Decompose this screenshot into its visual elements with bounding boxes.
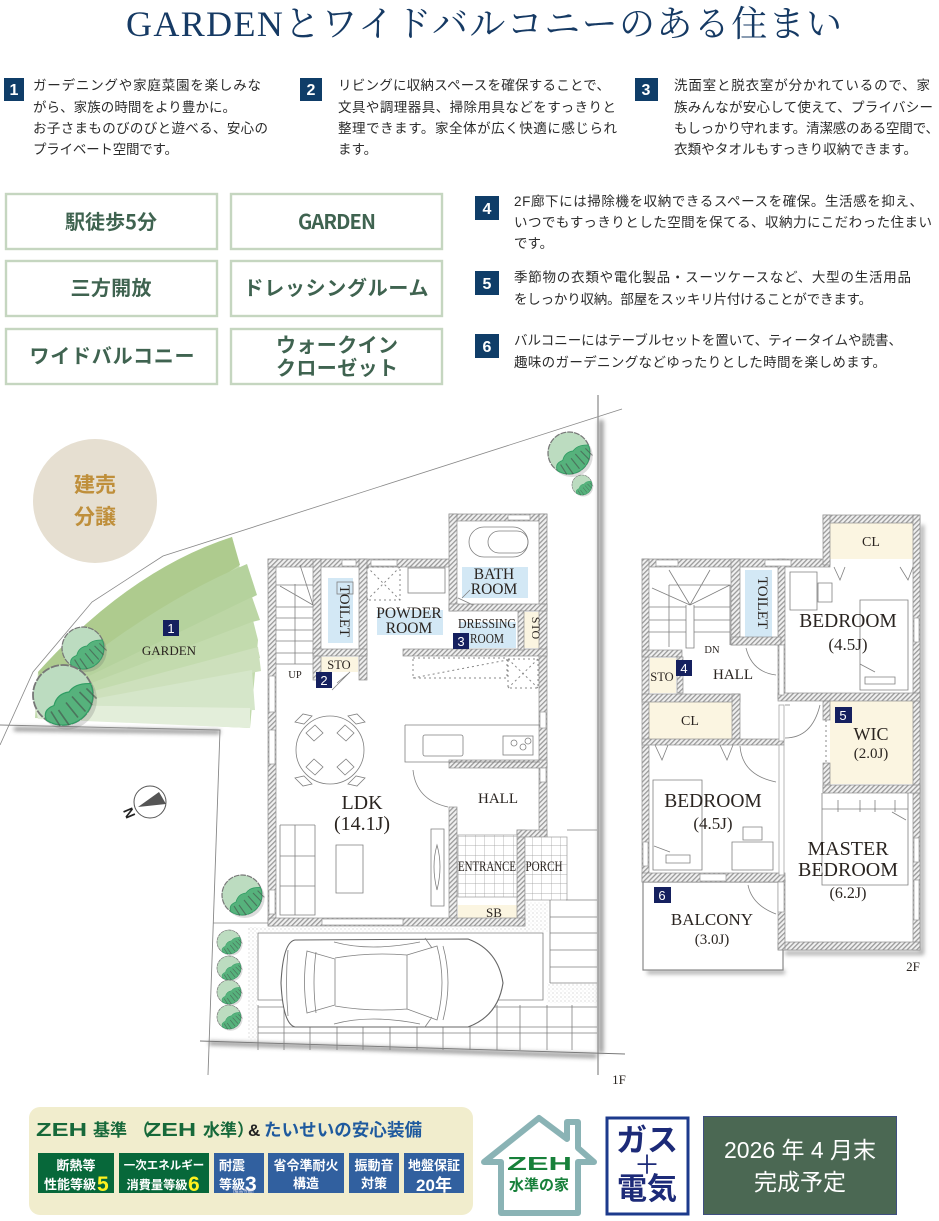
feature chips: クローゼット [276,352,398,381]
feature text 1: プライベート空間です。 [33,142,178,157]
panel heading: 水準 [203,1120,237,1140]
feature chips: ワイドバルコニー [30,340,194,369]
sale type badge: 分譲 [74,506,116,529]
walls 2F [642,515,920,950]
completion date box [704,1116,896,1214]
gas and electric badge [607,1118,688,1214]
badge: primary energy grade 6: 一次エネルギー [124,1158,204,1172]
room labels 2F: DN [704,645,720,656]
feature text 5: 季節物の衣類や電化製品・スーツケースなど、大型の生活用品 [514,269,911,285]
room labels 1F: BATH [474,566,514,583]
feature text 3: 洗面室と脱衣室が分かれているので、家 [674,78,930,93]
room labels 1F: PORCH [526,859,563,875]
badge: insulation grade 5: 断熱等 [56,1158,96,1173]
room labels 2F: CL [681,714,699,729]
feature chips: ドレッシングルーム [244,272,428,301]
badge: primary energy grade 6: 消費量等級 [127,1177,187,1192]
room labels 1F: HALL [478,791,518,807]
badge: vibration and sound [349,1153,399,1193]
room labels 1F: ENTRANCE [458,859,516,875]
room labels 2F: WIC [854,724,888,744]
feature text 2: リビングに収納スペースを確保することで、 [338,78,610,93]
door arcs and tiles [248,830,597,1040]
feature text 5: 5 [483,276,492,293]
room tints 1F [321,567,539,918]
feature text 2 [300,78,618,157]
fixtures 1F [332,527,540,807]
room labels 2F: BEDROOM [664,791,762,812]
feature text 1: がら、家族の時間をより豊かに。 [33,100,236,115]
ZEH equipment panel [29,1107,473,1215]
room labels 2F: (4.5J) [693,814,733,833]
room labels 1F: TOILET [336,585,352,637]
room labels 1F: DRESSING [458,617,516,632]
room labels 1F [288,566,563,920]
windows [269,515,546,925]
number badges 2F: 5 [839,708,847,723]
2F floor plan [642,515,922,974]
garden number badge: 1 [167,621,175,636]
number badges 1F [316,633,469,688]
feature text 6: バルコニーにはテーブルセットを置いて、ティータイムや読書、 [514,332,902,348]
feature text 3: 衣類やタオルもすっきり収納できます。 [674,142,917,157]
panel heading: ZEH [146,1120,196,1140]
site boundary 1F [0,395,625,1075]
room labels 2F: (3.0J) [695,932,729,948]
gas and electric badge: 電気 [617,1173,677,1206]
panel heading [36,1120,422,1140]
room labels 1F: STO [327,658,351,672]
room labels 2F: TOILET [754,577,770,629]
feature text 6 [475,332,902,370]
room labels 2F: STO [650,670,674,684]
feature text 4: 2F廊下には掃除機を収納できるスペースを確保。生活感を抑え、 [514,193,923,209]
panel heading: 基準 [93,1120,127,1140]
1F label: 1F [612,1072,626,1087]
number badges 1F: 2 [320,673,328,688]
badge: earthquake grade 3: 3 [245,1173,257,1196]
compass: N [120,805,138,821]
feature text 1: ガーデニングや家庭菜園を楽しみな [33,77,261,93]
room labels 2F: BALCONY [671,910,753,929]
gas and electric badge: ガス [616,1123,678,1158]
feature chips: 三方開放 [70,272,152,301]
garden label: GARDEN [142,643,197,658]
ZEH house logo: 水準の家 [509,1176,569,1194]
sale type badge: 建売 [74,474,116,497]
badge: earthquake grade 3 [214,1153,264,1196]
number badges 2F: 4 [680,661,688,676]
windows [643,560,919,920]
room labels 1F: ROOM [470,632,504,647]
room labels 1F: ROOM [386,620,432,637]
dining set [295,714,365,786]
room labels 1F: (14.1J) [334,813,390,835]
feature text 4: 4 [483,201,492,218]
feature text 3: 族みんなが安心して使えて、プライバシー [674,99,933,115]
feature text 3: 3 [642,82,651,99]
living furniture [280,825,444,915]
number badges 1F: 3 [457,634,465,649]
feature text 4: いつでもすっきりとした空間を保てる、収納力にこだわった住まい [514,215,932,230]
garden number badge [163,620,179,636]
trees [33,432,593,1031]
stairs 1F [276,565,313,664]
feature text 6: 6 [483,339,492,356]
completion date box: 2026 年 4 月末 [724,1137,876,1163]
room labels 1F: POWDER [376,605,442,622]
feature text 4 [475,193,932,251]
badge: insulation grade 5: 性能等級 [44,1177,96,1192]
room labels 2F: (4.5J) [828,635,868,654]
feature text 1: 1 [10,82,19,99]
room labels 1F: SB [486,905,502,920]
room labels 1F: LDK [341,792,383,814]
feature text 2: 整理できます。家全体が広く快適に感じられ [338,120,618,136]
furniture 2F [653,572,908,885]
room labels 2F: HALL [713,667,753,683]
badge: vibration and sound: 対策 [361,1176,387,1191]
feature text 1: お子さまものびのびと遊べる、安心の [33,121,268,136]
feature chips [6,194,442,384]
badge: ground warranty: 地盤保証 [408,1158,460,1173]
gas and electric badge: ＋ [634,1150,660,1180]
badge: earthquake grade 3: 耐震 [219,1158,245,1173]
panel heading: ZEH [36,1120,87,1140]
feature chips: GARDEN [298,206,376,235]
feature text 6: 趣味のガーデニングなどゆったりとした時間を楽しめます。 [514,354,886,370]
compass [120,786,166,821]
room labels 2F: CL [862,535,880,550]
badge: vibration and sound: 振動音 [354,1158,394,1173]
feature text 4: です。 [514,236,553,251]
ZEH house logo: ZEH [507,1154,572,1174]
balcony [643,882,783,970]
stairs 2F [649,570,730,648]
room labels 1F: ROOM [471,581,517,598]
badge: earthquake grade 3: 等級 [219,1177,245,1192]
feature text 3 [635,78,939,157]
number badges 2F [654,660,852,903]
room labels 2F: (2.0J) [854,746,888,762]
feature chips: 駅徒歩5分 [65,206,157,235]
panel heading: ） [237,1121,254,1140]
driveway paving [258,933,597,1050]
panel heading: & [248,1121,260,1140]
room labels 1F: STO [529,617,543,640]
car [281,938,503,1027]
badge: ground warranty: 20年 [416,1175,452,1195]
title: GARDENとワイドバルコニーのある住まい [126,4,842,44]
feature text 3: もしっかり守れます。清潔感のある空間で、 [674,120,939,136]
walls 1F [268,514,547,926]
room labels 2F: (6.2J) [830,885,866,902]
panel heading: たいせいの安心装備 [264,1120,422,1140]
feature text 2: 文具や調理器具、掃除用具などをすっきりと [338,99,616,115]
badge: fire resistance: 省令準耐火 [273,1158,339,1173]
badge: insulation grade 5 [38,1153,114,1196]
1F floor plan [248,514,626,1087]
feature chips: ウォークイン [276,329,398,358]
ZEH house logo [484,1118,594,1213]
badge: earthquake grade 3: [最高等級] [233,1188,254,1194]
feature text 5 [475,269,911,307]
feature text 2: ます。 [338,142,377,157]
number badges 2F: 6 [658,888,666,903]
badge: primary energy grade 6 [119,1153,209,1196]
garden lawn [35,537,261,728]
room tints 2F [649,523,913,784]
badge: fire resistance [268,1153,344,1193]
badge: primary energy grade 6: 6 [188,1173,200,1196]
door arcs 2F [655,567,913,914]
room labels 1F: UP [288,670,302,681]
room labels 2F: BEDROOM [798,859,898,881]
badge: insulation grade 5: 5 [97,1173,109,1196]
badge: ground warranty [404,1153,464,1195]
building shadow [647,525,922,972]
completion date box: 完成予定 [754,1169,846,1195]
badge: fire resistance: 構造 [293,1176,319,1191]
room labels 2F [650,535,898,948]
panel heading: （ [133,1121,150,1140]
room labels 2F: BEDROOM [799,611,897,632]
sale type badge [33,439,157,563]
2F label: 2F [906,959,920,974]
feature text 2: 2 [307,82,316,99]
feature text 5: をしっかり収納。部屋をスッキリ片付けることができます。 [514,292,872,307]
feature text 1 [4,77,268,157]
room labels 2F: MASTER [807,838,889,860]
